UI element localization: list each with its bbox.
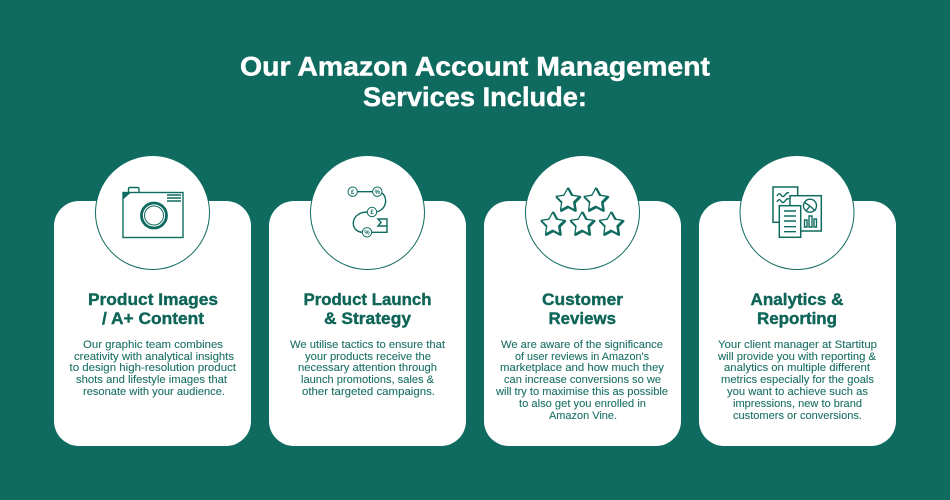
title: Services Include:: [363, 82, 587, 112]
description: Our graphic team combines: [83, 339, 224, 351]
description: [717, 339, 877, 422]
icon circle: [740, 156, 854, 270]
heading: [542, 290, 623, 328]
heading: Customer: [542, 290, 623, 309]
description: to design high-resolution product: [70, 362, 236, 374]
description: We utilise tactics to ensure that: [290, 339, 445, 351]
icon: launch route: [348, 187, 387, 237]
description: marketplace and how much they: [500, 362, 665, 374]
description: launch promotions, sales &: [301, 374, 435, 386]
description: analytics on multiple different: [724, 362, 870, 374]
heading: Analytics &: [750, 290, 844, 309]
icon circle: [526, 156, 640, 270]
icon circle: [96, 156, 210, 270]
description: will try to maximise this as possible: [495, 386, 668, 398]
icon: five stars: [541, 188, 623, 235]
heading: Product Launch: [304, 290, 432, 309]
description: of user reviews in Amazon's: [515, 351, 650, 363]
description: you want to achieve such as: [727, 386, 869, 398]
card background: [54, 201, 251, 446]
panel: product images: [54, 156, 251, 446]
icon: launch route: %: [375, 190, 381, 196]
description: to also get you enrolled in: [519, 398, 646, 410]
icon circle: [310, 156, 424, 270]
icon: launch route: £: [370, 210, 374, 216]
icon: launch route: %: [364, 230, 370, 236]
panel: analytics and reporting: [699, 156, 896, 446]
description: [70, 339, 236, 398]
card background: [699, 201, 896, 446]
description: [290, 339, 445, 398]
description: other targeted campaigns.: [302, 386, 435, 398]
heading: & Strategy: [324, 309, 412, 328]
description: will provide you with reporting &: [717, 351, 877, 363]
card background: [484, 201, 681, 446]
description: Amazon Vine.: [549, 410, 617, 422]
description: your products receive the: [305, 351, 431, 363]
panel: customer reviews: [484, 156, 681, 446]
heading: Reviews: [548, 309, 616, 328]
title: Our Amazon Account Management: [240, 52, 710, 82]
description: We are aware of the significance: [501, 339, 663, 351]
description: Your client manager at Startitup: [718, 339, 877, 351]
icon: report documents: [773, 187, 821, 237]
heading: Reporting: [757, 309, 837, 328]
heading: / A+ Content: [102, 309, 204, 328]
description: [495, 339, 668, 422]
heading: [304, 290, 432, 328]
card background: [269, 201, 466, 446]
description: creativity with analytical insights: [74, 351, 235, 363]
title: [240, 52, 710, 112]
icon: launch route: £: [351, 190, 355, 196]
description: can increase conversions so we: [504, 374, 661, 386]
panel: product launch: [269, 156, 466, 446]
description: shots and lifestyle images that: [76, 374, 227, 386]
icon: camera: [123, 188, 183, 238]
description: resonate with your audience.: [83, 386, 225, 398]
description: necessary attention through: [298, 362, 437, 374]
heading: [88, 290, 218, 328]
description: metrics especially for the goals: [721, 374, 875, 386]
heading: Product Images: [88, 290, 218, 309]
description: customers or conversions.: [733, 410, 862, 422]
description: impressions, new to brand: [733, 398, 862, 410]
heading: [750, 290, 844, 328]
